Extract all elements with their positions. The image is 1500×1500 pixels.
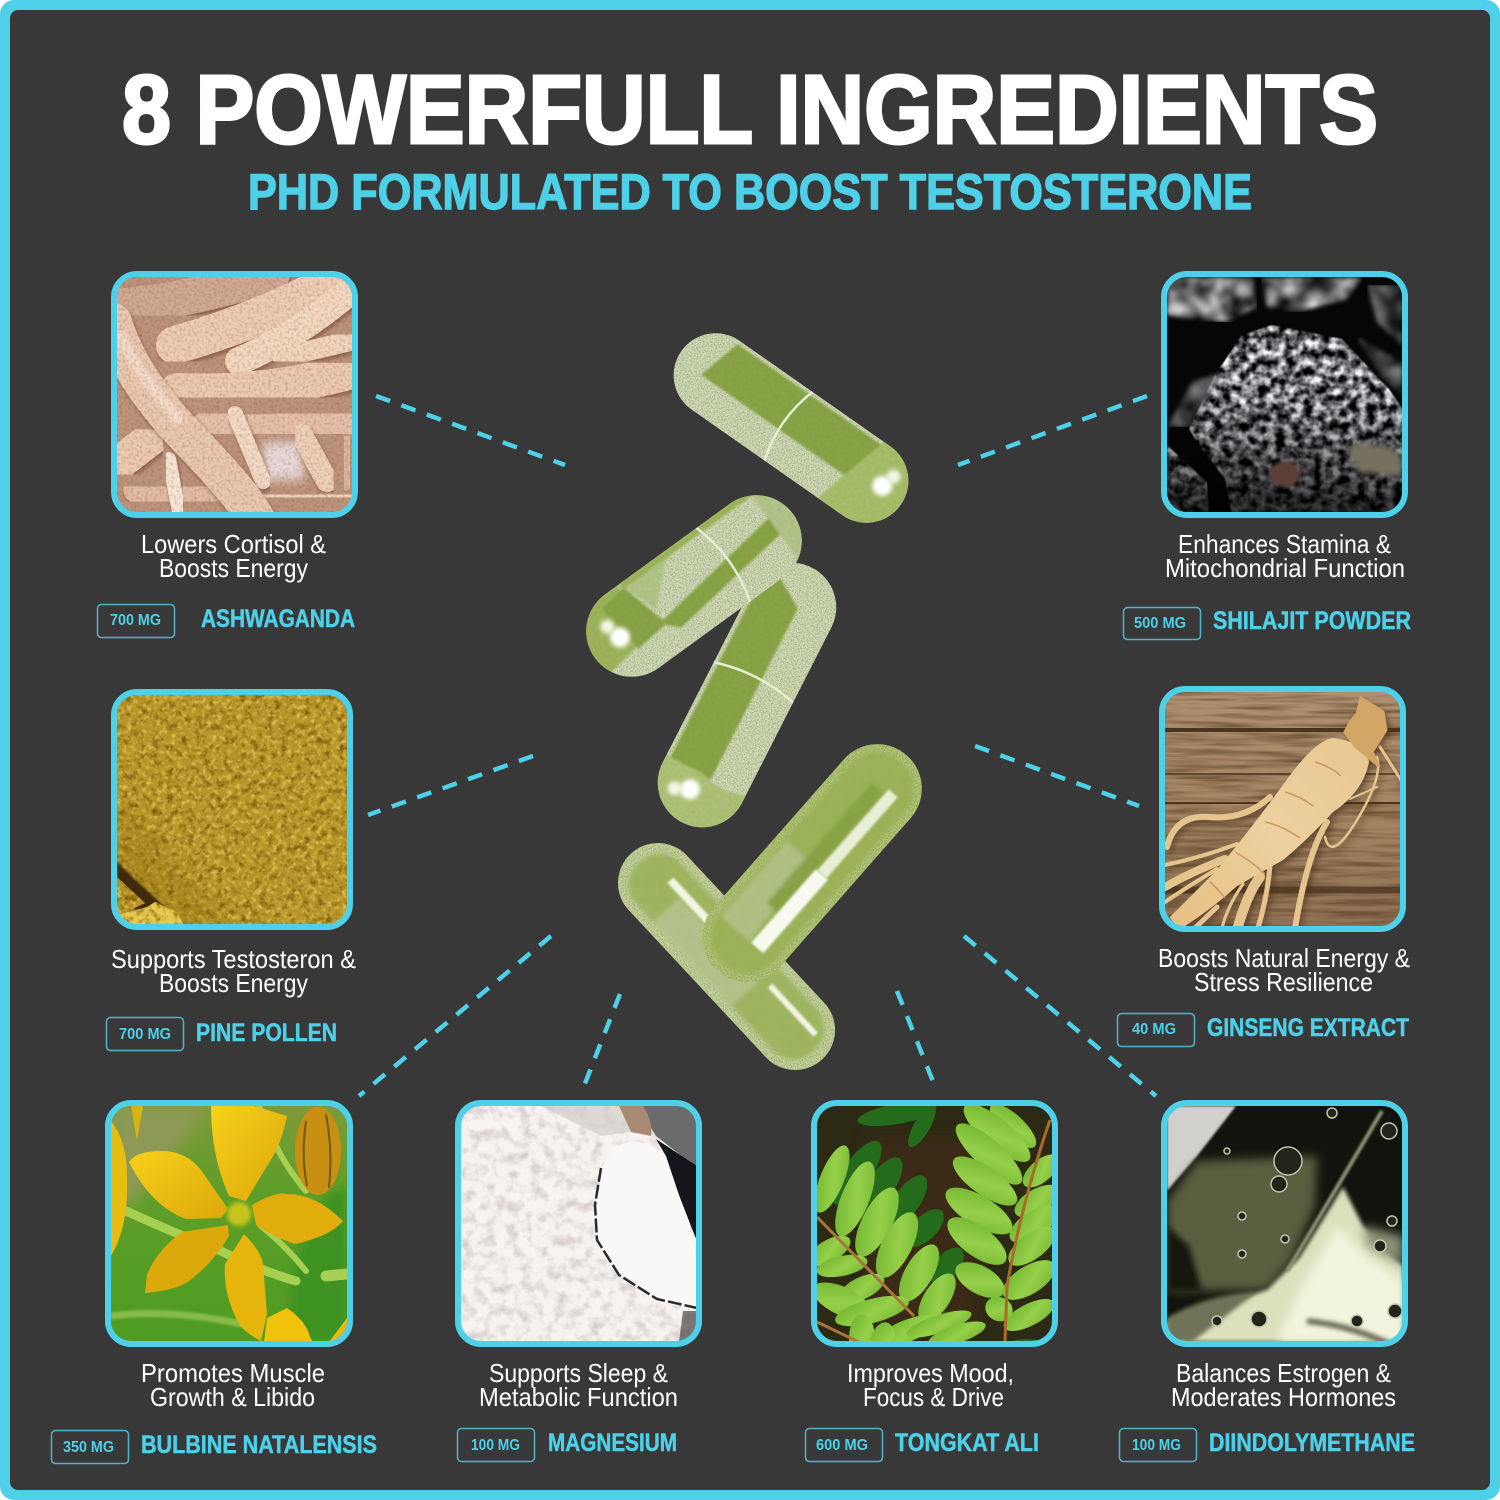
ingredient: magnesium [458,1103,699,1462]
ingredient: bulbine [52,1103,377,1464]
ingredient: ashwagandha [98,274,359,638]
photo: ashwagandha roots [112,274,359,522]
dose badge [806,1428,882,1462]
frame [1164,274,1405,515]
description: Metabolic Function [479,1382,678,1412]
description: Focus & Drive [863,1382,1004,1412]
subtitle: PHD FORMULATED TO BOOST TESTOSTERONE [248,164,1252,220]
ingredient: shilajit [1124,274,1411,640]
photo: shilajit rock [1167,277,1405,515]
name: ASHWAGANDA [201,605,355,633]
dose badge [1124,608,1200,640]
ingredient: pine pollen [106,692,356,1050]
photo: tongkat ali leaves [817,1106,1052,1341]
dose badge [1118,1014,1194,1046]
ingredient: diindolylmethane [1120,1103,1415,1462]
dose badge [98,604,174,638]
dashed connector lines [359,396,1156,1096]
name: GINSENG EXTRACT [1207,1014,1409,1042]
photo: gel with bubbles [1167,1106,1402,1341]
capsule: middle [658,563,836,828]
name: BULBINE NATALENSIS [141,1431,377,1459]
name: TONGKAT ALI [895,1429,1039,1457]
dose badge: 100 MG [1132,1437,1181,1454]
description: Boosts Natural Energy & [1158,943,1410,973]
ingredient: ginseng [1118,689,1410,1046]
frame [1164,1103,1405,1344]
description [111,944,356,998]
title: 8 POWERFULL INGREDIENTS [122,55,1378,164]
description: Boosts Energy [159,553,308,583]
description: Lowers Cortisol & [141,529,326,559]
dose badge: 40 MG [1132,1021,1176,1038]
frame [814,1103,1055,1344]
photo: pine pollen [117,695,348,930]
dose badge [1120,1428,1196,1462]
description [479,1358,678,1412]
capsule: top [674,333,908,523]
photo: magnesium powder [461,1106,697,1342]
description [847,1358,1014,1412]
description [1165,529,1405,583]
description: Improves Mood, [847,1358,1014,1388]
description: Supports Sleep & [489,1358,668,1388]
description: Moderates Hormones [1171,1382,1396,1412]
dose badge: 700 MG [119,1026,171,1043]
dose badge [52,1430,128,1464]
description: Growth & Libido [150,1382,315,1412]
description: Promotes Muscle [141,1358,325,1388]
photo: bulbine flower [111,1106,347,1366]
description: Enhances Stamina & [1178,529,1391,559]
capsule: lower right [702,744,922,982]
description [141,529,326,583]
description [141,1358,325,1412]
frame [114,692,350,927]
description [1171,1358,1396,1412]
name: DIINDOLYMETHANE [1209,1429,1415,1457]
frame [1162,689,1403,929]
capsule: upper left [586,495,802,677]
dose badge: 700 MG [110,612,161,629]
description [1158,943,1410,997]
central capsules [586,333,922,1070]
name: MAGNESIUM [548,1429,677,1457]
capsule: bottom [618,843,836,1070]
dose badge [458,1428,534,1462]
name: PINE POLLEN [196,1019,337,1047]
description: Boosts Energy [159,968,308,998]
ingredient: tongkat ali [803,1095,1065,1462]
dose badge: 500 MG [1134,615,1186,632]
frame [458,1103,699,1344]
dose badge [106,1018,184,1050]
dose badge: 350 MG [63,1439,114,1456]
dose badge: 600 MG [816,1437,868,1454]
dose badge: 100 MG [471,1437,520,1454]
description: Supports Testosteron & [111,944,356,974]
description: Stress Resilience [1194,967,1373,997]
photo: ginseng root [1165,692,1401,930]
description: Balances Estrogen & [1176,1358,1391,1388]
description: Mitochondrial Function [1165,553,1405,583]
name: SHILAJIT POWDER [1213,607,1411,635]
frame [108,1103,350,1344]
frame [114,274,355,515]
